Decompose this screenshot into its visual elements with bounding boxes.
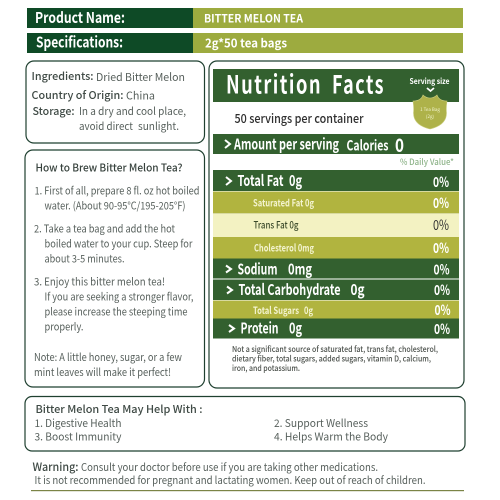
row: cholesterol: Cholesterol 0mg xyxy=(254,240,314,254)
row: total fat xyxy=(213,170,459,192)
product name row: BITTER MELON TEA xyxy=(204,10,304,26)
row: total sugars: 0g xyxy=(304,302,313,317)
brew steps: properly. xyxy=(44,320,84,334)
brew steps: 3. Enjoy this bitter melon tea! xyxy=(34,274,165,290)
row: total carbohydrate xyxy=(213,279,459,300)
brew steps: If you are seeking a stronger flavor, xyxy=(44,290,194,304)
serving size badge xyxy=(413,95,447,129)
nutrition footnote xyxy=(232,343,438,374)
brew note xyxy=(34,350,183,380)
warning: Warning: xyxy=(32,459,78,475)
panel: may help with: 2. Support Wellness xyxy=(274,416,368,431)
amount per serving bar xyxy=(213,131,459,158)
brew heading: How to Brew Bitter Melon Tea? xyxy=(36,160,182,176)
panel: nutrition facts xyxy=(209,61,464,388)
warning xyxy=(32,459,426,488)
row: total carbohydrate: 0g xyxy=(350,279,365,300)
row: cholesterol: 0% xyxy=(433,238,449,258)
brew note: mint leaves will make it perfect! xyxy=(34,365,171,380)
amount per serving bar: Amount per serving xyxy=(233,134,339,154)
panel: product details: Dried Bitter Melon xyxy=(96,69,185,85)
row: saturated fat xyxy=(213,192,459,214)
panel: may help with xyxy=(25,396,465,451)
brew steps: boiled water to your cup. Steep for xyxy=(44,236,193,252)
panel: product details: sunlight. xyxy=(138,119,179,134)
row: protein: Protein xyxy=(240,318,278,338)
product name row xyxy=(27,7,463,28)
row: protein: 0% xyxy=(434,319,450,339)
row: total fat: 0% xyxy=(433,172,449,192)
daily value label: % Daily Value* xyxy=(400,156,454,168)
brew steps xyxy=(34,184,200,334)
row: protein: 0g xyxy=(289,318,302,338)
panel: may help with: Bitter Melon Tea May Help With : xyxy=(36,402,202,417)
row: trans fat xyxy=(213,214,459,237)
product name row: Product Name: xyxy=(35,7,125,28)
nutrition header xyxy=(213,66,459,102)
brew steps: about 3-5 minutes. xyxy=(44,252,125,266)
panel: product details xyxy=(26,61,204,143)
panel: product details: In a dry and cool place, xyxy=(79,104,186,119)
amount per serving bar: 0 xyxy=(395,131,404,158)
row: total carbohydrate: 0% xyxy=(434,280,450,300)
row: saturated fat: Saturated Fat 0g xyxy=(253,194,314,210)
panel: how to brew xyxy=(25,150,204,387)
row: total sugars: 0% xyxy=(434,300,451,320)
warning: Consult your doctor before use if you are taking other medications. xyxy=(81,460,378,475)
brew steps: please increase the steeping time xyxy=(44,304,188,320)
panel: product details: avoid direct xyxy=(79,119,133,134)
panel: may help with: 3. Boost Immunity xyxy=(34,430,122,444)
serving size badge: 1 Tea Bag xyxy=(420,107,440,113)
serving size badge: (2g) xyxy=(426,114,435,120)
row: saturated fat: 0% xyxy=(433,193,449,213)
panel: may help with: 1. Digestive Health xyxy=(34,416,122,431)
nutrition header: Facts xyxy=(332,66,385,102)
amount per serving bar: Calories xyxy=(346,136,389,156)
row: total sugars: Total Sugars xyxy=(253,302,299,317)
row: sodium xyxy=(213,258,459,280)
panel: may help with: 4. Helps Warm the Body xyxy=(274,430,389,444)
nutrition header: Serving size xyxy=(410,76,450,87)
panel: product details: China xyxy=(126,88,155,104)
panel: product details: Storage: xyxy=(32,103,74,119)
warning: It is not recommended for pregnant and lactating women. Keep out of reach of children. xyxy=(34,473,426,488)
nutrition footnote: Not a significant source of saturated fat, trans fat, cholesterol, xyxy=(232,343,438,355)
brew steps: 2. Take a tea bag and add the hot xyxy=(34,222,175,236)
panel: product details: Country of Origin: xyxy=(32,87,124,103)
row: sodium: Sodium xyxy=(238,258,278,280)
row: total sugars xyxy=(213,300,459,320)
specifications row: Specifications: xyxy=(36,32,123,52)
row: total carbohydrate: Total Carbohydrate xyxy=(238,279,341,300)
row: trans fat: Trans Fat 0g xyxy=(254,216,299,232)
specifications row xyxy=(27,32,463,53)
row: trans fat: 0% xyxy=(433,215,449,235)
row: cholesterol xyxy=(213,237,459,258)
row: total fat: 0g xyxy=(289,170,302,191)
row: total fat: Total Fat xyxy=(238,170,284,191)
panel: product details: Ingredients: xyxy=(32,68,94,84)
brew steps: 1. First of all, prepare 8 fl. oz hot boiled xyxy=(34,184,200,198)
specifications row: 2g*50 tea bags xyxy=(205,34,287,52)
servings per container: 50 servings per container xyxy=(234,108,364,127)
nutrition header: Nutrition xyxy=(226,66,322,102)
nutrition footnote: iron, and potassium. xyxy=(232,362,300,374)
brew note: Note: A little honey, sugar, or a few xyxy=(34,350,183,365)
row: protein xyxy=(213,318,459,339)
brew steps: water. (About 90-95°C/195-205°F) xyxy=(44,198,186,214)
row: sodium: 0mg xyxy=(288,258,312,280)
nutrition footnote: dietary fiber, total sugars, added sugars, vitamin D, calcium, xyxy=(232,352,431,364)
row: sodium: 0% xyxy=(434,260,450,280)
